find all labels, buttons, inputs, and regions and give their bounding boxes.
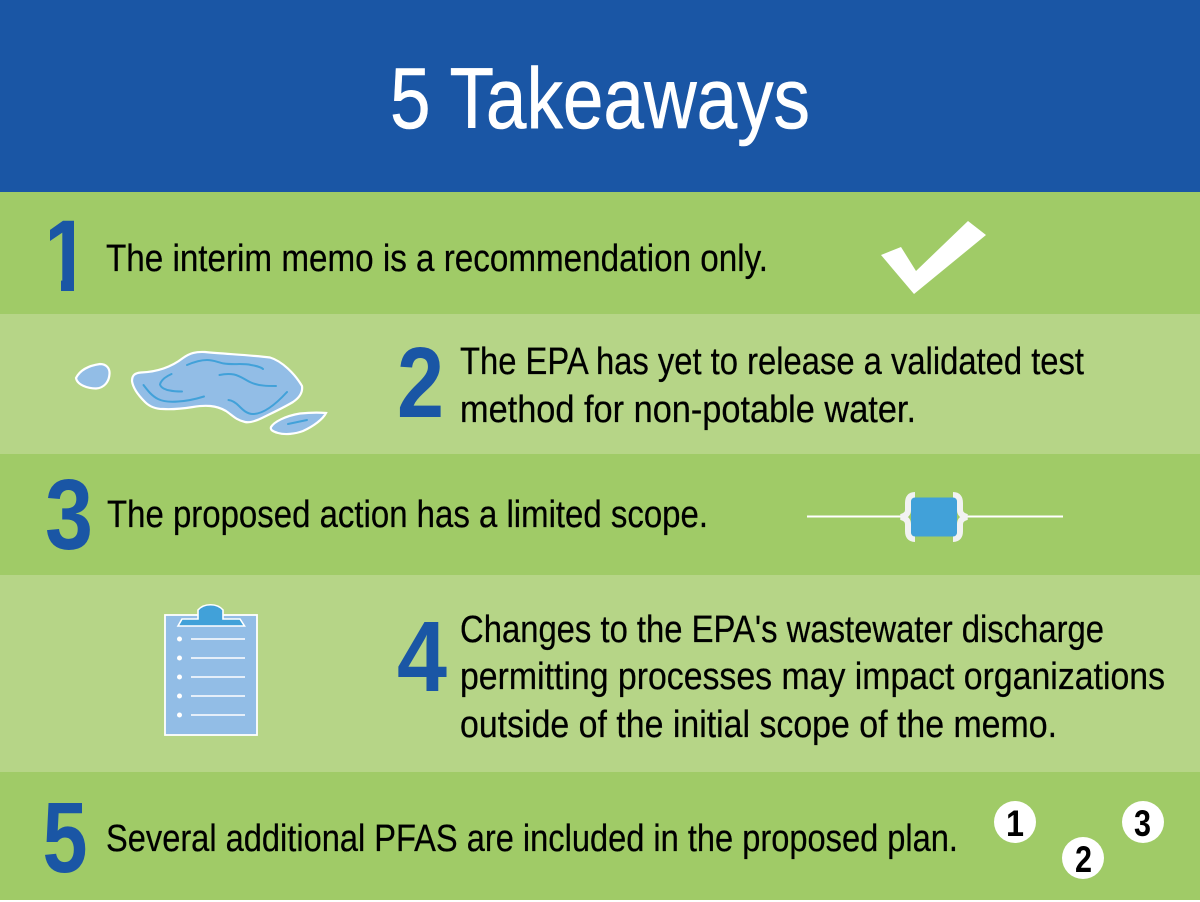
panel: takeaway 1	[0, 192, 1200, 314]
number 3: 3	[45, 459, 93, 571]
number 1: 1	[40, 199, 92, 313]
text: takeaway 4: Changes to the EPA's wastewater discharge	[460, 609, 1104, 651]
number 4: 4	[397, 601, 447, 713]
text: takeaway 2: method for non-potable water.	[460, 389, 916, 431]
number 5: 5	[42, 782, 88, 894]
icon: numbered circles	[994, 801, 1164, 880]
icon: check mark	[881, 221, 986, 294]
panel: takeaway 5	[0, 772, 1200, 900]
icon: numbered circles: 2	[1075, 839, 1092, 880]
panel: takeaway 3	[0, 454, 1200, 575]
text: takeaway 3: The proposed action has a limited scope.	[107, 494, 708, 536]
header band	[0, 0, 1200, 192]
icon: limited scope bracket	[807, 495, 1063, 539]
number 2: 2	[397, 327, 444, 439]
text: takeaway 4	[460, 609, 1165, 746]
title: 5 Takeaways	[390, 51, 810, 147]
panel: takeaway 4	[0, 575, 1200, 772]
panel: takeaway 2	[0, 314, 1200, 454]
icon: clipboard	[165, 605, 257, 735]
icon: numbered circles: 1	[1006, 803, 1024, 844]
text: takeaway 4: outside of the initial scope of the memo.	[460, 704, 1057, 746]
text: takeaway 2: The EPA has yet to release a validated test	[460, 341, 1084, 383]
icon: water puddles	[76, 352, 326, 434]
text: takeaway 2	[460, 341, 1084, 431]
text: takeaway 5: Several additional PFAS are included in the proposed plan.	[106, 818, 958, 860]
text: takeaway 1: The interim memo is a recommendation only.	[106, 238, 768, 280]
icon: numbered circles: 3	[1134, 803, 1151, 844]
